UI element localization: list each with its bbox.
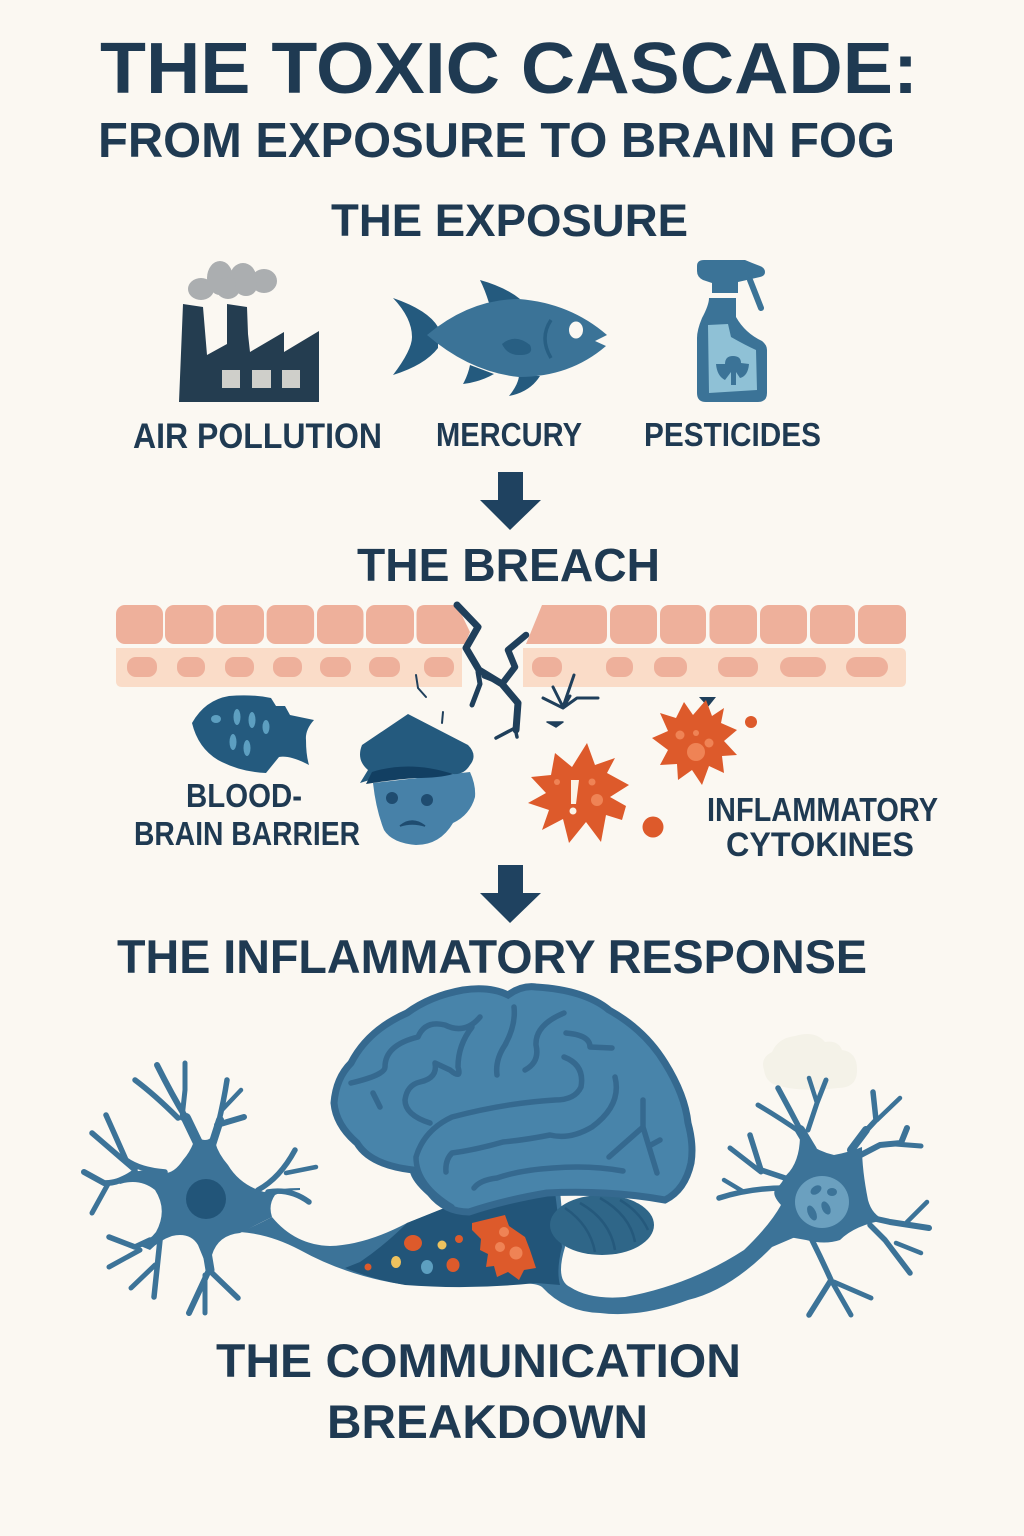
label: air pollution: AIR POLLUTION bbox=[133, 417, 382, 456]
label: blood-brain barrier: BLOOD- bbox=[186, 777, 302, 814]
heading: the breach: THE BREACH bbox=[357, 539, 660, 591]
fog cloud bbox=[763, 1034, 857, 1090]
arrow: exposure to breach bbox=[480, 472, 541, 530]
subtitle: FROM EXPOSURE TO BRAIN FOG bbox=[98, 114, 895, 168]
icon: fish bbox=[393, 280, 607, 396]
left neuron bbox=[84, 1063, 316, 1313]
right neuron bbox=[719, 1078, 929, 1315]
label: inflammatory cytokines: INFLAMMATORY bbox=[707, 791, 938, 828]
title: THE TOXIC CASCADE: bbox=[100, 29, 918, 109]
icon: cytokine burst with warning bbox=[528, 743, 629, 843]
icon: factory with smoke bbox=[179, 261, 319, 402]
label: mercury: MERCURY bbox=[436, 416, 582, 453]
icon: pesticide spray bottle bbox=[697, 260, 767, 402]
axon inflamed segment bbox=[345, 1192, 562, 1287]
heading: the communication breakdown bbox=[216, 1334, 741, 1448]
cerebellum bbox=[550, 1195, 654, 1255]
cytokine particle bbox=[642, 816, 664, 838]
heading: the exposure: THE EXPOSURE bbox=[331, 195, 688, 246]
label: pesticides: PESTICIDES bbox=[644, 416, 821, 453]
icon: blood-borne toxin fish bbox=[192, 695, 314, 773]
toxin particles bbox=[364, 1235, 463, 1274]
label: blood-brain barrier: BRAIN BARRIER bbox=[134, 815, 360, 852]
heading: the communication breakdown: THE COMMUNICATION bbox=[216, 1334, 741, 1387]
heading: the communication breakdown: BREAKDOWN bbox=[327, 1395, 648, 1448]
inflammation damage on axon bbox=[472, 1215, 536, 1280]
label: blood-brain barrier bbox=[134, 777, 360, 852]
arrow: breach to inflammation bbox=[480, 865, 541, 923]
label: inflammatory cytokines bbox=[707, 791, 938, 864]
label: inflammatory cytokines: CYTOKINES bbox=[726, 826, 914, 864]
cytokine particle bbox=[745, 716, 757, 728]
heading: the inflammatory response: THE INFLAMMATORY RESPONSE bbox=[117, 930, 867, 983]
icon: cytokine burst bbox=[652, 697, 737, 785]
icon: sad police guard bbox=[360, 714, 475, 845]
axon bbox=[240, 1190, 800, 1314]
crack bbox=[416, 605, 598, 738]
brain bbox=[334, 987, 692, 1212]
diagram: damaged blood-brain barrier bbox=[116, 605, 906, 738]
diagram: neurons and brain bbox=[84, 987, 929, 1315]
